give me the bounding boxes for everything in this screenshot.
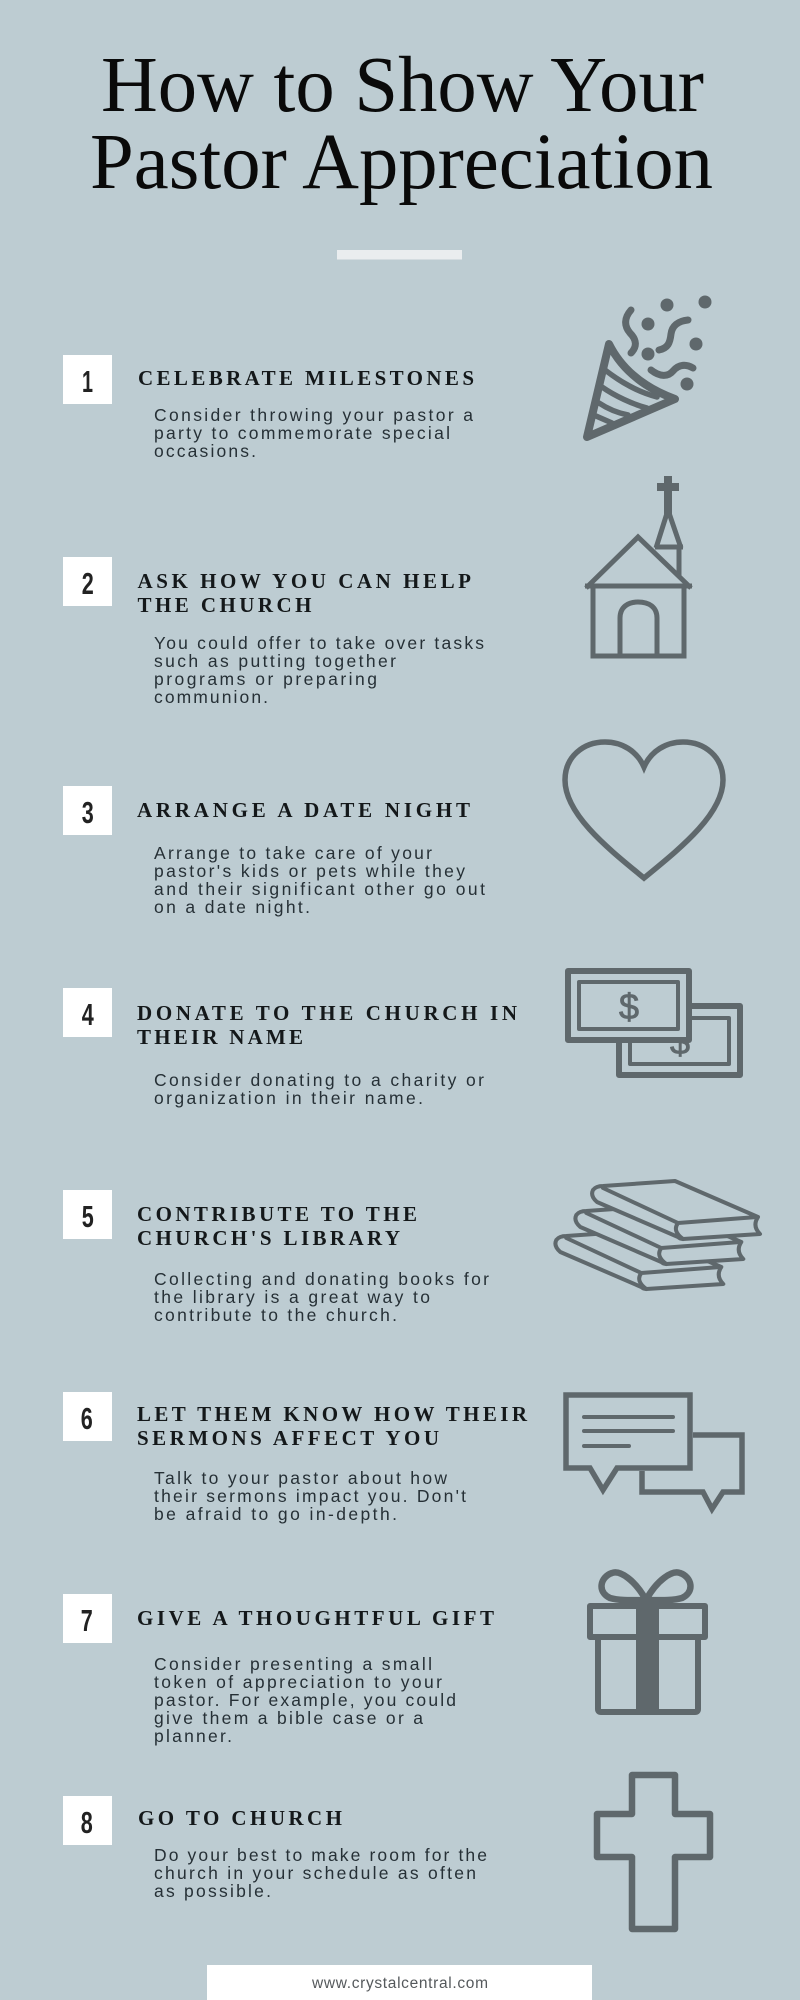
heading 7: GIVE A THOUGHTFUL GIFT	[137, 1606, 494, 1630]
heading 4	[137, 1001, 517, 1049]
title: How to Show Your	[101, 42, 704, 129]
heading 2: THE CHURCH	[138, 593, 312, 617]
panel: step 1 celebrate milestones	[63, 355, 474, 461]
heading 6: LET THEM KNOW HOW THEIR	[137, 1402, 528, 1426]
heading 2	[138, 569, 471, 617]
heading 1: CELEBRATE MILESTONES	[138, 366, 474, 390]
panel: step 4 donate to the church	[63, 988, 517, 1108]
panel: step 2 ask how you can help	[63, 557, 484, 707]
heading 3: ARRANGE A DATE NIGHT	[137, 798, 470, 822]
body text 4: organization in their name.	[154, 1088, 423, 1108]
body text 1: party to commemorate special	[154, 423, 450, 443]
panel: step 8 go to church	[63, 1796, 487, 1901]
number badge 8	[63, 1796, 112, 1845]
heading 2: ASK HOW YOU CAN HELP	[138, 569, 471, 593]
body text 7: pastor. For example, you could	[154, 1690, 456, 1710]
body text 3: Arrange to take care of your	[154, 843, 432, 863]
number badge 2	[63, 557, 112, 606]
body text 3: pastor's kids or pets while they	[154, 861, 465, 881]
body text 8: Do your best to make room for the	[154, 1845, 487, 1865]
heading 5	[137, 1202, 417, 1250]
number badge 7	[63, 1594, 112, 1643]
body text 6	[154, 1468, 466, 1524]
icon: party popper	[587, 296, 712, 437]
icon: cross	[597, 1775, 710, 1929]
heading 6	[137, 1402, 528, 1450]
number badge 4: 4	[82, 997, 94, 1032]
body text 4: Consider donating to a charity or	[154, 1070, 484, 1090]
body text 2	[154, 633, 484, 707]
body text 2: communion.	[154, 687, 268, 707]
heading 8: GO TO CHURCH	[138, 1806, 342, 1830]
icon: stack of books	[555, 1181, 760, 1289]
footer website bar	[207, 1965, 592, 2000]
body text 4	[154, 1070, 484, 1108]
number badge 5: 5	[82, 1199, 94, 1234]
number badge 6: 6	[81, 1401, 93, 1436]
number badge 8: 8	[81, 1805, 93, 1840]
body text 3	[154, 843, 485, 917]
heading 5: CONTRIBUTE TO THE	[137, 1202, 417, 1226]
heading 4: THEIR NAME	[137, 1025, 303, 1049]
body text 8: as possible.	[154, 1881, 271, 1901]
number badge 3	[63, 786, 112, 835]
number badge 1	[63, 355, 112, 404]
body text 1: Consider throwing your pastor a	[154, 405, 473, 425]
icon: heart	[565, 742, 723, 878]
number badge 5	[63, 1190, 112, 1239]
body text 2: You could offer to take over tasks	[154, 633, 484, 653]
panel: step 5 contribute to the library	[63, 1190, 489, 1325]
body text 8	[154, 1845, 487, 1901]
title	[90, 42, 713, 206]
title: Pastor Appreciation	[90, 119, 713, 206]
body text 7	[154, 1654, 456, 1746]
body text 5: contribute to the church.	[154, 1305, 397, 1325]
body text 5: Collecting and donating books for	[154, 1269, 489, 1289]
body text 6: their sermons impact you. Don't	[154, 1486, 466, 1506]
body text 5	[154, 1269, 489, 1325]
body text 1: occasions.	[154, 441, 256, 461]
body text 7: Consider presenting a small	[154, 1654, 432, 1674]
body text 7: token of appreciation to your	[154, 1672, 442, 1692]
icon: money bills: $	[619, 986, 639, 1027]
body text 7: planner.	[154, 1726, 232, 1746]
body text 6: be afraid to go in-depth.	[154, 1504, 397, 1524]
number badge 2: 2	[82, 566, 94, 601]
panel: step 6 sermons	[63, 1392, 528, 1524]
body text 1	[154, 405, 473, 461]
heading 4: DONATE TO THE CHURCH IN	[137, 1001, 517, 1025]
body text 3: and their significant other go out	[154, 879, 485, 899]
icon: speech bubbles	[566, 1395, 742, 1509]
number badge 6	[63, 1392, 112, 1441]
number badge 4	[63, 988, 112, 1037]
panel: step 3 arrange a date night	[63, 786, 485, 917]
title divider bar	[337, 250, 462, 260]
body text 8: church in your schedule as often	[154, 1863, 476, 1883]
heading 6: SERMONS AFFECT YOU	[137, 1426, 439, 1450]
body text 6: Talk to your pastor about how	[154, 1468, 447, 1488]
heading 5: CHURCH'S LIBRARY	[137, 1226, 400, 1250]
body text 2: such as putting together	[154, 651, 396, 671]
body text 5: the library is a great way to	[154, 1287, 430, 1307]
icon: church	[585, 476, 692, 656]
number badge 1: 1	[82, 364, 93, 399]
icon: money bills	[568, 971, 740, 1075]
footer website bar: www.crystalcentral.com	[311, 1975, 488, 1992]
number badge 3: 3	[82, 795, 94, 830]
icon: gift box	[590, 1572, 705, 1713]
panel: step 7 thoughtful gift	[63, 1594, 494, 1746]
body text 2: programs or preparing	[154, 669, 377, 689]
icon: money bills: $	[670, 1021, 690, 1062]
body text 3: on a date night.	[154, 897, 310, 917]
body text 7: give them a bible case or a	[154, 1708, 423, 1728]
number badge 7: 7	[81, 1603, 93, 1638]
